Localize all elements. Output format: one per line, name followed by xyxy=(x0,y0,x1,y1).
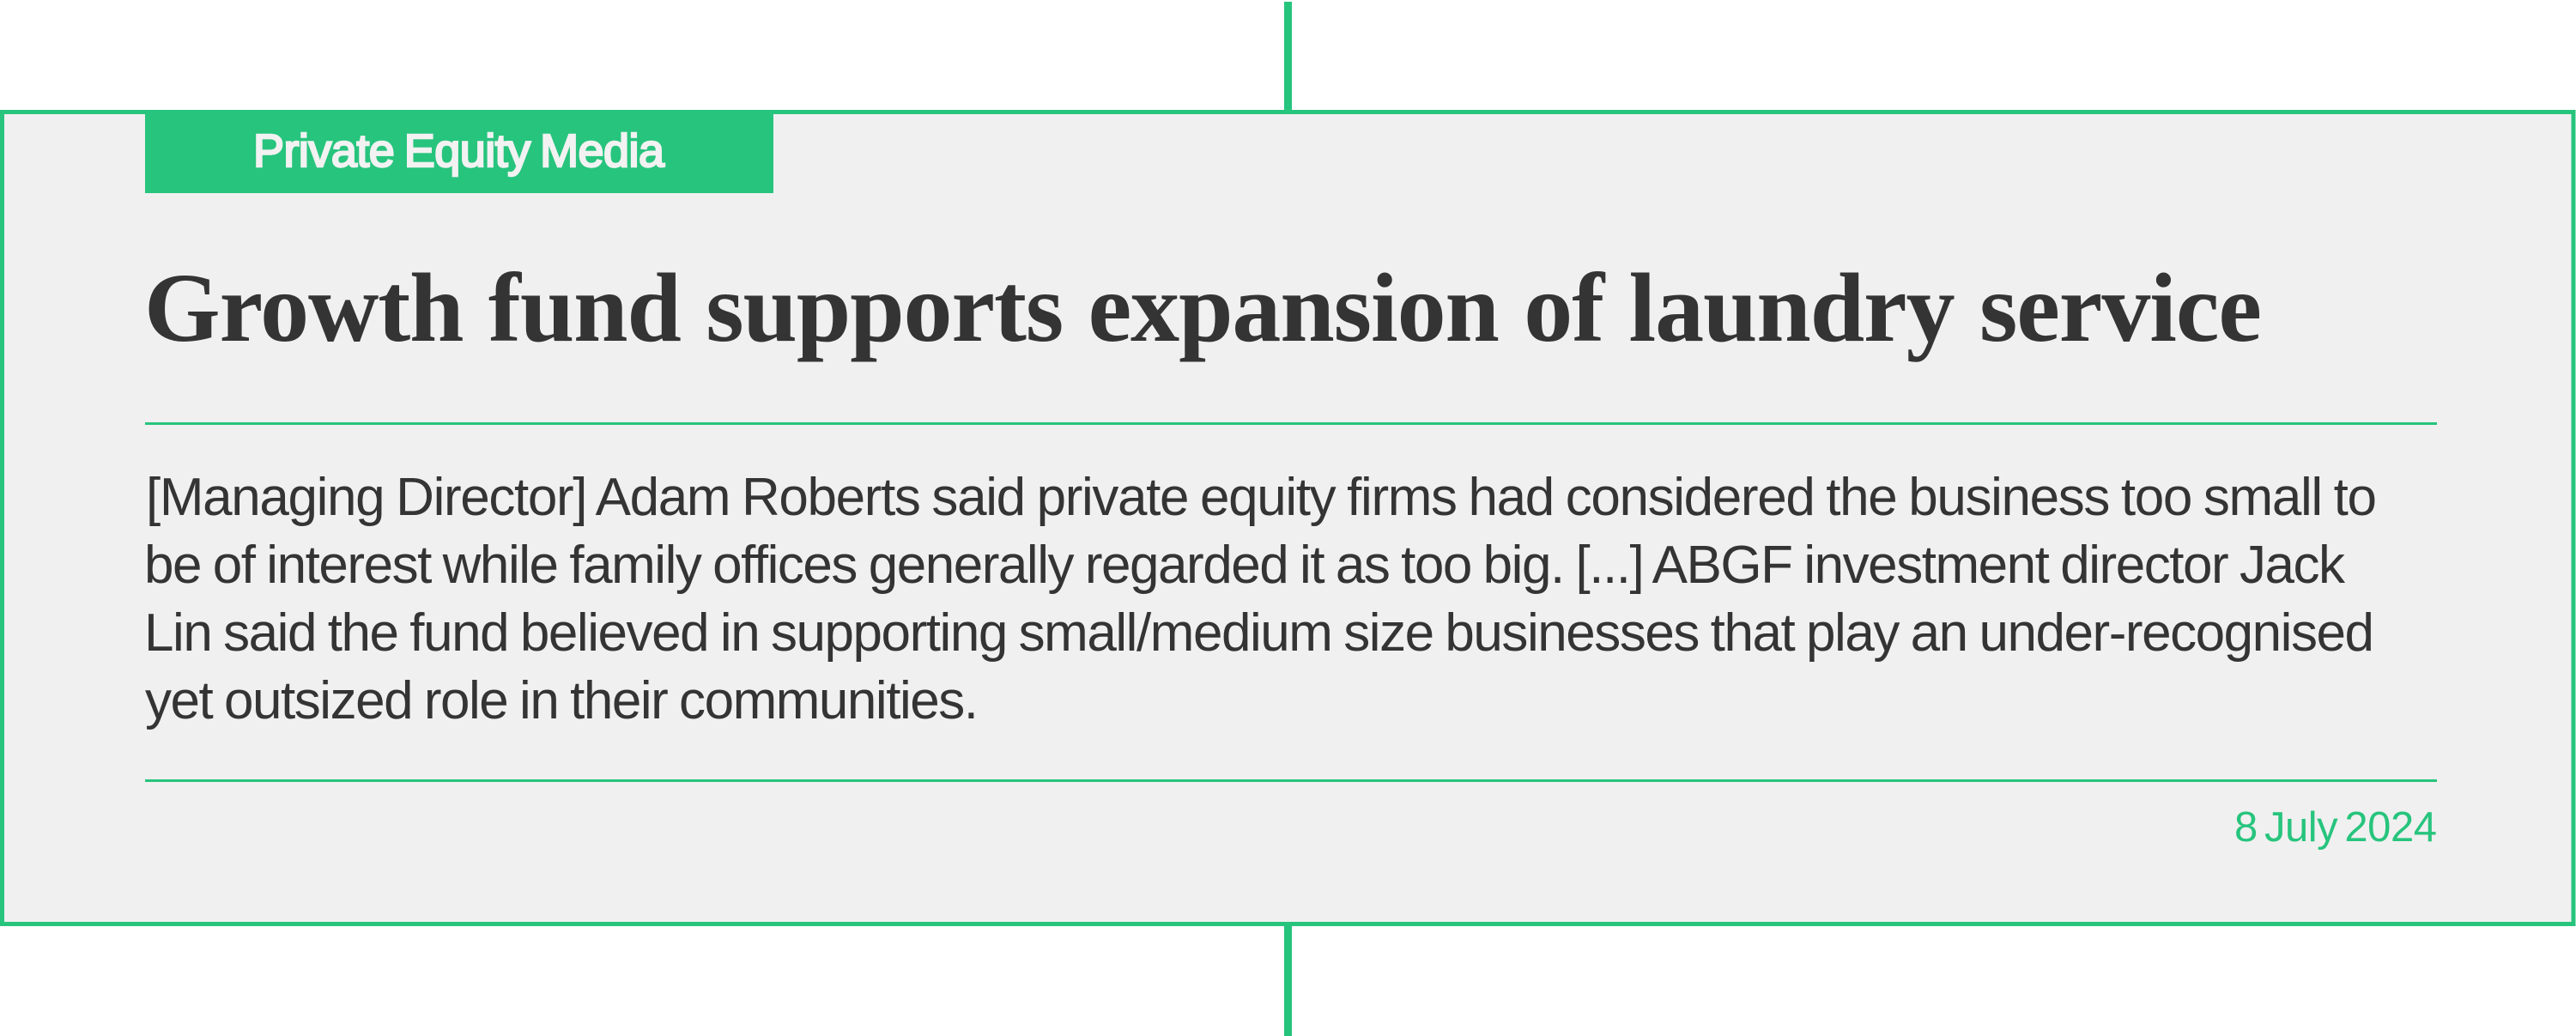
connector line: top xyxy=(1284,2,1292,111)
body text block xyxy=(144,468,2377,730)
body text block: [Managing Director] Adam Roberts said private equity firms had considered the business too small to xyxy=(146,468,2377,527)
body text block: yet outsized role in their communities. xyxy=(145,671,979,730)
source tab xyxy=(145,110,773,193)
body text block: Lin said the fund believed in supporting small/medium size businesses that play an under-recognised xyxy=(144,603,2374,663)
heading: Growth fund supports expansion of laundry service xyxy=(144,253,2262,362)
body text block: be of interest while family offices generally regarded it as too big. [...] ABGF investment director Jack xyxy=(144,536,2346,595)
source name: Private Equity Media xyxy=(253,125,665,177)
date: 8 July 2024 xyxy=(2234,804,2437,851)
panel: quote card xyxy=(2,110,2573,924)
connector line: bottom xyxy=(1284,925,1292,1036)
